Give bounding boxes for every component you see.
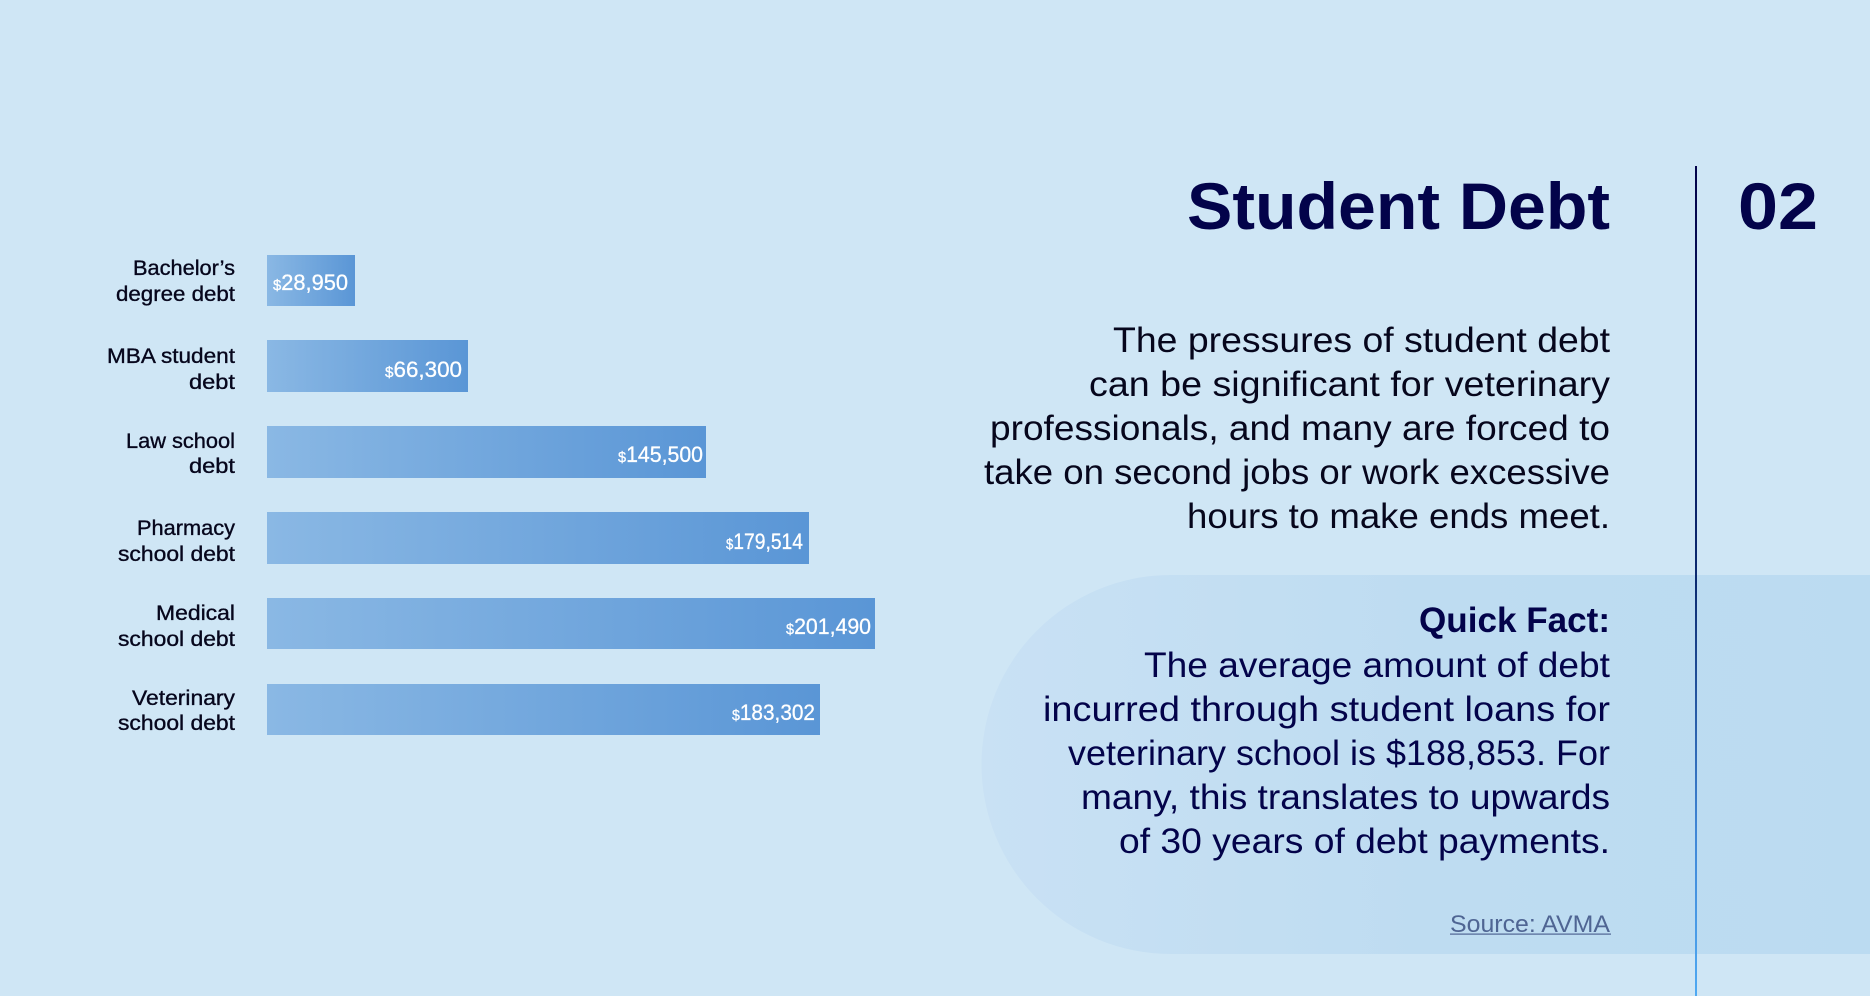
bar: Law school debt: debt [189,455,235,478]
bar: Bachelor's degree debt [116,255,355,306]
text block: intro: The pressures of student debt [1113,321,1610,360]
bar: Medical school debt [118,598,875,651]
heading: Student Debt: Student Debt [1187,169,1610,243]
bar: Medical school debt: school debt [118,628,235,651]
bar: MBA student debt [107,340,468,394]
bar: Bachelor's degree debt: Bachelor’s [133,257,235,280]
text block: quick fact: veterinary school is $188,853. For [1068,734,1610,773]
bar chart [107,255,875,735]
bar: Pharmacy school debt: Pharmacy [137,517,236,540]
text block: intro [984,321,1611,536]
panel: quick fact pill [982,575,1870,954]
bar: Bachelor's degree debt: degree debt [116,283,235,306]
bar: Medical school debt: Medical [156,602,235,625]
bar: Law school debt: Law school [126,430,235,453]
text block: intro: can be significant for veterinary [1089,365,1611,404]
text block: quick fact: many, this translates to upwards [1081,778,1610,817]
bar: Medical school debt: $201,490 [786,614,871,639]
bar: MBA student debt: MBA student [107,345,235,368]
bar: Law school debt: $145,500 [618,442,703,467]
bar: Law school debt [126,426,706,478]
text block: quick fact: of 30 years of debt payments. [1119,822,1610,861]
bar: Pharmacy school debt: school debt [118,543,235,566]
source: Source: AVMA [1450,911,1610,938]
bar: Pharmacy school debt: $179,514 [726,529,803,554]
text block: quick fact: Quick Fact: [1419,601,1610,640]
bar: Bachelor's degree debt: $28,950 [273,270,348,295]
bar: MBA student debt: $66,300 [385,357,462,382]
text block: intro: hours to make ends meet. [1187,497,1610,536]
bar: Veterinary school debt: Veterinary [132,687,236,710]
text block: quick fact [1043,601,1610,861]
bar: MBA student debt: debt [189,371,235,394]
bar: Veterinary school debt [118,684,820,735]
bar: Veterinary school debt: $183,302 [732,700,815,725]
text block: quick fact: The average amount of debt [1144,646,1610,685]
vertical rule [1695,166,1697,996]
bar: Veterinary school debt: school debt [118,712,235,735]
text block: quick fact: incurred through student loans for [1043,690,1610,729]
text block: intro: take on second jobs or work excessive [984,453,1610,492]
text block: intro: professionals, and many are forced to [990,409,1610,448]
bar: Pharmacy school debt [118,512,809,566]
section number: 02 [1738,169,1818,243]
